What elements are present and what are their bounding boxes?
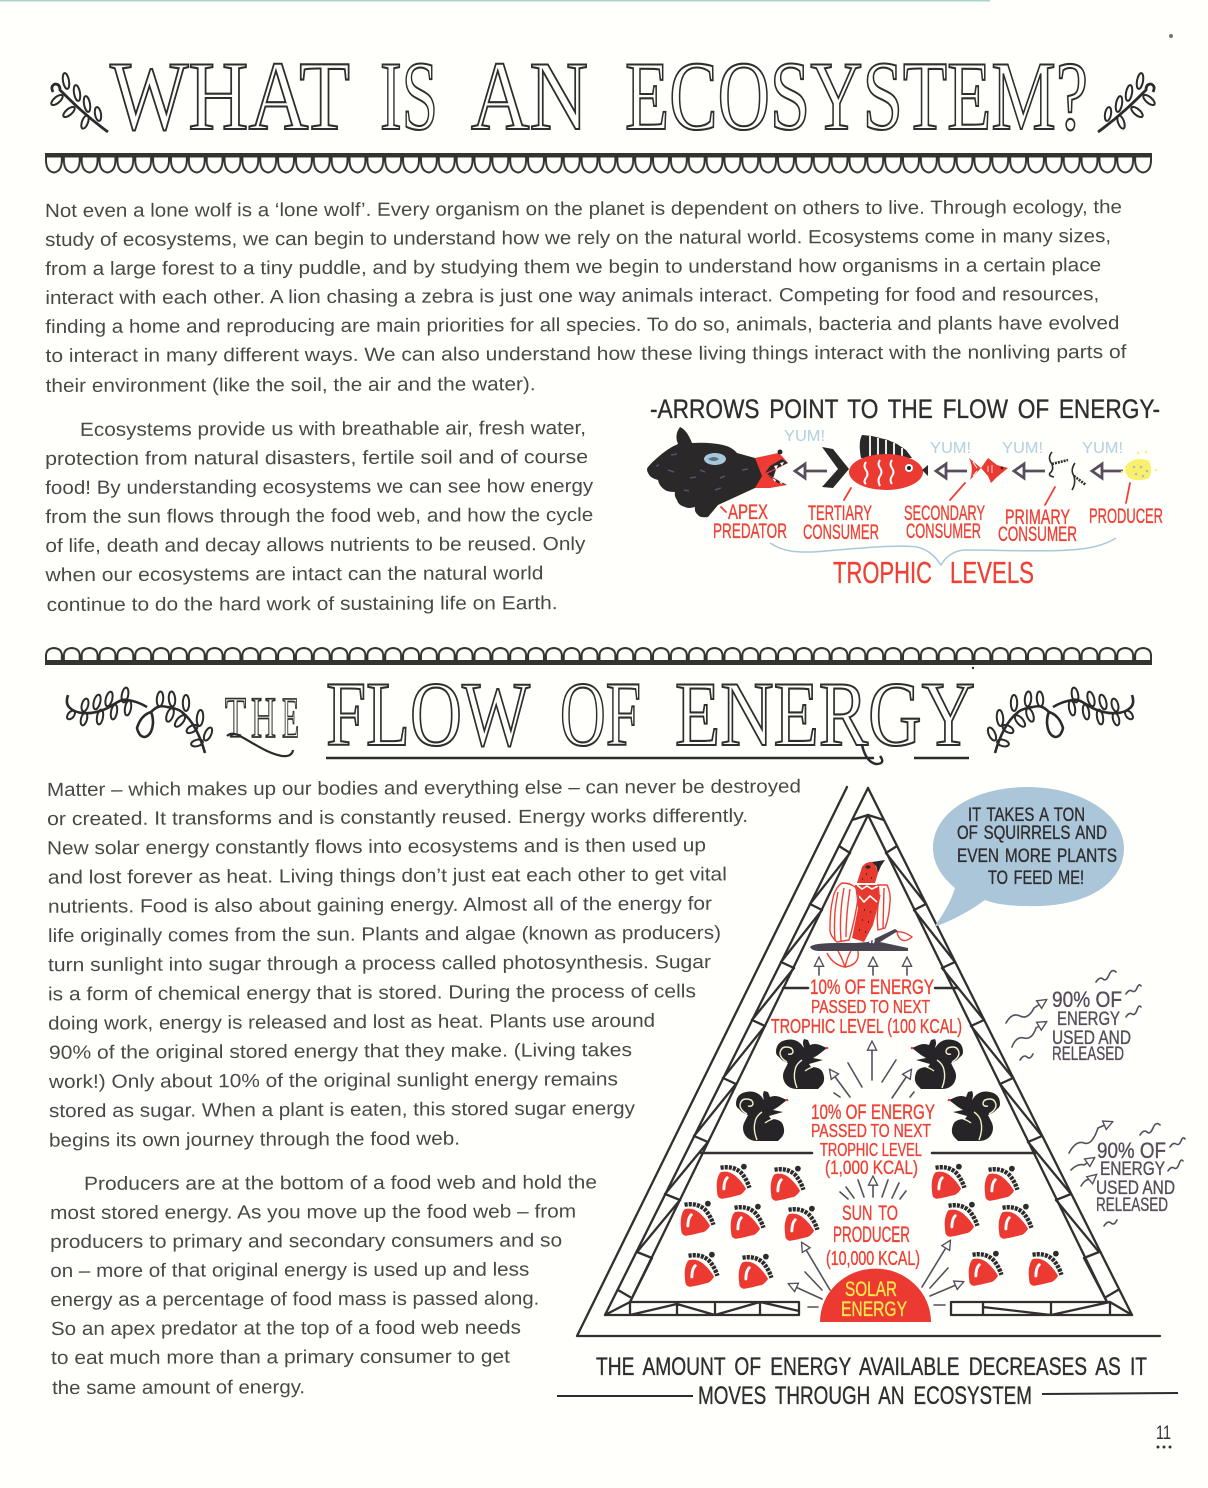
text block: producers paragraph: producers to primary and secondary consumers and so	[50, 1230, 562, 1253]
labels: trophic levels: TERTIARY	[808, 502, 872, 525]
label: sun to producer: PRODUCER	[833, 1222, 910, 1247]
pyramid truss left	[605, 788, 884, 1315]
title: flow of energy: FLOW	[326, 663, 530, 765]
label: trophic levels heading	[833, 555, 1034, 590]
title: what is an ecosystem	[110, 42, 1088, 151]
pyramid outer frame	[577, 787, 1160, 1336]
label: 10 percent to 100 kcal	[771, 976, 962, 1038]
text block: matter paragraph: 90% of the original stored energy that they make. (Living takes	[49, 1040, 632, 1064]
text block: intro paragraph: interact with each other. A lion chasing a zebra is just one way animals interact. Competing for food and resources,	[45, 284, 1099, 309]
label: 10 percent to 100 kcal: 10% OF ENERGY	[810, 976, 934, 999]
text block: matter paragraph: life originally comes from the sun. Plants and algae (known as producers)	[48, 923, 721, 947]
the: T	[225, 685, 246, 750]
arrow plankton eats producer	[1092, 464, 1123, 478]
label: 10 percent to 1000 kcal: 10% OF ENERGY	[811, 1101, 935, 1124]
label: 10 percent to 1000 kcal: PASSED TO NEXT	[811, 1121, 931, 1141]
text block: intro paragraph: to interact in many different ways. We can also understand how these living things interact with the nonliving parts of	[45, 342, 1127, 367]
labels: trophic levels: PRIMARY	[1005, 506, 1070, 529]
icon: bird of prey	[810, 860, 912, 967]
text block: producers paragraph	[50, 1172, 598, 1399]
label: trophic levels heading: LEVELS	[950, 555, 1034, 590]
labels: trophic levels: CONSUMER	[998, 523, 1077, 546]
callout: 90 percent lower: 90% OF	[1097, 1138, 1166, 1163]
text block: intro paragraph: finding a home and reproducing are main priorities for all species. To do so, animals, bacteria and plants have evolved	[45, 313, 1119, 338]
icon: wolf apex predator	[647, 427, 788, 517]
title: flow of energy	[326, 663, 975, 765]
title: flow of energy: OF	[560, 663, 641, 765]
arrow fish eats small fish	[936, 464, 967, 478]
text block: producers paragraph: on – more of that original energy is used up and less	[50, 1260, 529, 1282]
right vine ornament	[986, 687, 1135, 753]
page number: 11	[1156, 1423, 1171, 1444]
left vine ornament	[65, 687, 214, 753]
text block: producers paragraph: Producers are at the bottom of a food web and hold the	[84, 1172, 597, 1195]
text block: matter paragraph: or created. It transforms and is constantly reused. Energy works differently.	[47, 806, 748, 830]
callout: 90 percent upper: ENERGY	[1057, 1009, 1120, 1030]
callout: 90 percent upper	[1006, 971, 1141, 1065]
callout: 90 percent upper: RELEASED	[1052, 1044, 1124, 1065]
text block: matter paragraph: doing work, energy is released and lost as heat. Plants use around	[48, 1011, 655, 1035]
label: sun to producer: SUN TO	[842, 1202, 898, 1225]
text block: ecosystems provide: Ecosystems provide us with breathable air, fresh water,	[80, 418, 586, 441]
page number	[1156, 1423, 1172, 1448]
icon: producer algae	[1121, 451, 1157, 480]
brace	[770, 538, 1116, 565]
yum labels: YUM!	[784, 428, 825, 445]
text block: matter paragraph: New solar energy constantly flows into ecosystems and is then used up	[47, 835, 706, 859]
speech bubble: OF SQUIRRELS AND	[957, 823, 1107, 844]
text block: ecosystems provide: from the sun flows through the food web, and how the cycle	[45, 505, 593, 528]
title: flow of energy: ENERGY	[675, 663, 975, 765]
callout: 90 percent upper: 90% OF	[1052, 987, 1122, 1012]
text block: matter paragraph: turn sunlight into sugar through a process called photosynthesis. Sugar	[48, 952, 712, 976]
yum labels: YUM!	[1082, 440, 1123, 457]
text block: matter paragraph: stored as sugar. When a plant is eaten, this stored sugar energy	[49, 1098, 636, 1122]
text block: ecosystems provide: protection from natural disasters, fertile soil and of course	[45, 447, 588, 470]
solar rays arrows	[789, 1241, 963, 1307]
text block: matter paragraph: begins its own journey through the food web.	[49, 1129, 460, 1152]
pyramid truss right	[868, 788, 1132, 1315]
speech bubble: IT TAKES A TON	[968, 805, 1085, 826]
section header: what is an ecosystem	[50, 42, 1156, 151]
text block: intro paragraph	[45, 197, 1127, 397]
text block: intro paragraph: study of ecosystems, we can begin to understand how we rely on the natural world. Ecosystems come in many sizes,	[45, 226, 1111, 251]
icon: primary consumer zooplankton	[1050, 452, 1086, 490]
text block: producers paragraph: most stored energy. As you move up the food web – from	[50, 1201, 576, 1224]
icon: small red fish	[969, 458, 1008, 483]
text block: intro paragraph: Not even a lone wolf is a ‘lone wolf’. Every organism on the planet is dependent on others to live. Through ecology, the	[45, 197, 1122, 222]
rays above sun to producer	[840, 1177, 906, 1199]
title: what is an ecosystem: IS	[380, 42, 438, 151]
red leader lines	[721, 483, 1130, 512]
icon: solar energy sun: ENERGY	[841, 1298, 907, 1321]
text block: producers paragraph: So an apex predator at the top of a food web needs	[51, 1318, 521, 1340]
text block: matter paragraph: and lost forever as heat. Living things don’t just eat each other to get vital	[48, 864, 727, 889]
label: trophic levels heading: TROPHIC	[833, 555, 932, 590]
text block: intro paragraph: from a large forest to a tiny puddle, and by studying them we begin to understand how organisms in a certain place	[45, 255, 1101, 280]
yum labels: YUM!	[930, 440, 971, 457]
labels: trophic levels: SECONDARY	[904, 502, 985, 525]
text block: ecosystems provide: when our ecosystems are intact can the natural world	[44, 563, 544, 586]
label: sun to producer: (10,000 KCAL)	[826, 1248, 920, 1270]
section header: the flow of energy	[65, 663, 1135, 765]
text block: matter paragraph: work!) Only about 10% of the original sunlight energy remains	[48, 1069, 618, 1093]
icon: solar energy sun: SOLAR	[845, 1278, 897, 1301]
label: 10 percent to 1000 kcal: TROPHIC LEVEL	[820, 1140, 922, 1160]
label: 10 percent to 100 kcal: PASSED TO NEXT	[811, 997, 930, 1017]
text block: ecosystems provide: of life, death and decay allows nutrients to be reused. Only	[45, 534, 586, 557]
text block: ecosystems provide	[44, 418, 594, 616]
arrows up from squirrels to bird	[819, 958, 907, 975]
label: sun to producer	[826, 1202, 920, 1270]
labels: trophic levels	[713, 501, 1163, 546]
icons: squirrels	[736, 1039, 1000, 1141]
text block: intro paragraph: their environment (like the soil, the air and the water).	[46, 374, 536, 397]
scalloped divider middle	[45, 646, 1152, 665]
speech bubble: EVEN MORE PLANTS	[957, 846, 1117, 867]
arrow wolf eats fish	[795, 464, 827, 478]
labels: trophic levels: APEX	[728, 501, 768, 524]
callout: 90 percent upper: USED AND	[1052, 1028, 1131, 1049]
caption: energy decreases	[557, 1353, 1178, 1410]
right sprig ornament	[1098, 73, 1156, 132]
yum labels	[784, 428, 1123, 457]
speech bubble: TO FEED ME!	[988, 868, 1084, 889]
speech bubble	[933, 787, 1124, 927]
text block: matter paragraph: Matter – which makes up our bodies and everything else – can never be destroyed	[47, 776, 801, 801]
pyramid truss base right	[951, 1302, 1132, 1315]
label: 10 percent to 1000 kcal: (1,000 KCAL)	[825, 1158, 918, 1179]
label: 10 percent to 1000 kcal	[811, 1101, 935, 1179]
icon: solar energy sun	[820, 1269, 931, 1322]
scalloped divider top	[45, 153, 1152, 174]
text block: matter paragraph	[46, 776, 803, 1152]
panel: food chain diagram	[647, 394, 1163, 590]
underline and swash	[326, 745, 969, 764]
title: what is an ecosystem: AN	[471, 42, 588, 151]
title: what is an ecosystem: WHAT	[110, 42, 350, 151]
labels: trophic levels: PRODUCER	[1089, 505, 1163, 528]
text block: matter paragraph: is a form of chemical energy that is stored. During the process of cells	[48, 981, 696, 1005]
arrows up from acorns to squirrels	[830, 1042, 914, 1098]
caption: energy decreases: MOVES THROUGH AN ECOSYSTEM	[698, 1382, 1032, 1410]
icon: large red fish	[822, 435, 928, 490]
labels: trophic levels: PREDATOR	[713, 520, 787, 543]
label: 10 percent to 100 kcal: TROPHIC LEVEL (100 KCAL)	[771, 1016, 962, 1038]
text block: producers paragraph: energy as a percentage of food mass is passed along.	[50, 1289, 539, 1311]
icons: acorns	[681, 1164, 1061, 1289]
text block: matter paragraph: nutrients. Food is also about gaining energy. Almost all of the energy for	[48, 894, 713, 918]
section header: the flow of energy: E	[282, 685, 299, 750]
the: H	[251, 685, 276, 750]
pyramid truss base left	[605, 1302, 799, 1315]
panel: energy pyramid	[577, 787, 1160, 1336]
text block: ecosystems provide: food! By understanding ecosystems we can see how energy	[45, 476, 594, 499]
yum labels: YUM!	[1002, 440, 1043, 457]
labels: trophic levels: CONSUMER	[906, 520, 981, 543]
labels: trophic levels: CONSUMER	[803, 521, 879, 544]
callout: 90 percent lower: ENERGY	[1100, 1159, 1165, 1180]
callout: 90 percent lower	[1069, 1122, 1185, 1226]
text block: ecosystems provide: continue to do the hard work of sustaining life on Earth.	[47, 593, 558, 616]
level dividers	[701, 988, 1035, 1153]
callout: 90 percent lower: RELEASED	[1096, 1195, 1168, 1216]
left sprig ornament	[50, 73, 108, 132]
callout: 90 percent lower: USED AND	[1096, 1178, 1175, 1199]
arrow small fish eats plankton	[1014, 464, 1045, 478]
the	[225, 685, 299, 756]
text block: producers paragraph: the same amount of energy.	[52, 1377, 305, 1399]
text block: producers paragraph: to eat much more than a primary consumer to get	[51, 1347, 511, 1369]
